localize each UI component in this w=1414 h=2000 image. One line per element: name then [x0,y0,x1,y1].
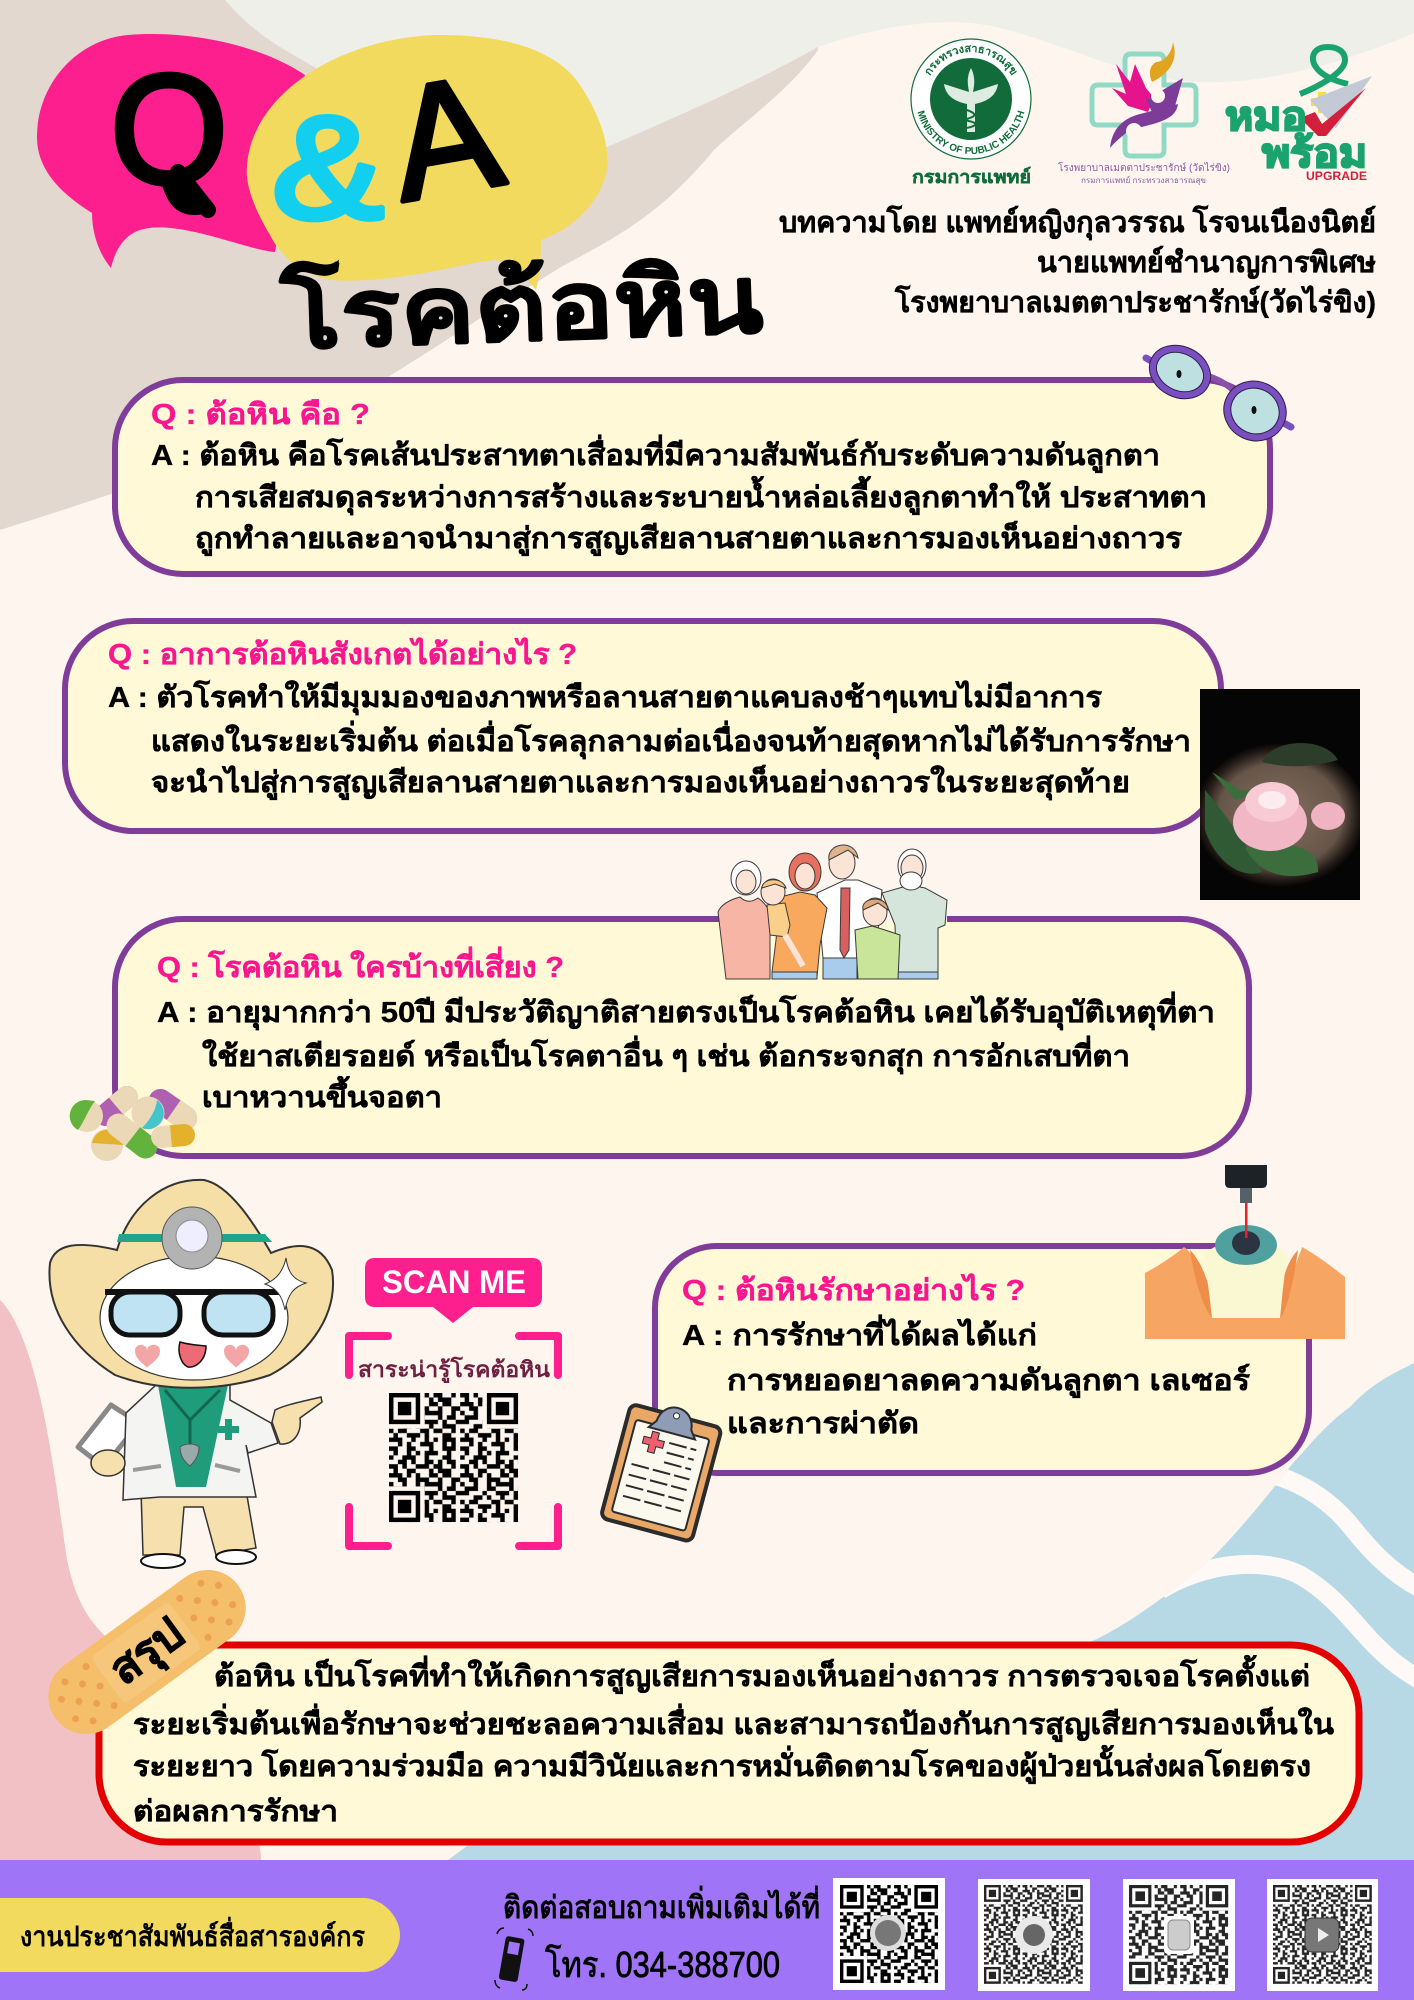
panel: treatment: Q : ต้อหินรักษาอย่างไร ? [682,1273,1025,1307]
logo: Metta hospital: โรงพยาบาลเมตตาประชารักษ์ (วัดไร่ขิง) [1058,161,1230,174]
heading: Q & A: A [377,40,514,235]
illustration: family [718,838,947,979]
QR code: glaucoma facts [349,1336,558,1546]
panel: summary: ระยะเริ่มต้นเพื่อรักษาจะช่วยชะลอความเสื่อม และสามารถป้องกันการสูญเสียการมองเห็นใน [133,1703,1334,1742]
icon: pills [70,1082,202,1163]
heading: Q & A [110,40,514,249]
footer bar [0,1860,1414,2000]
author credit [779,204,1376,319]
title: disease name: โรคต้อหิน [278,245,765,368]
panel: symptoms: จะนำไปสู่การสูญเสียลานสายตาและการมองเห็นอย่างถาวรในระยะสุดท้าย [151,764,1130,800]
panel: symptoms: แสดงในระยะเริ่มต้น ต่อเมื่อโรคลุกลามต่อเนื่องจนท้ายสุดหากไม่ได้รับการรักษา [151,720,1191,759]
bandage label: summary [33,1555,261,1749]
QR code: glaucoma facts: สาระน่ารู้โรคต้อหิน [358,1356,550,1384]
panel: what is glaucoma: ถูกทำลายและอาจนำมาสู่การสูญเสียลานสายตาและการมองเห็นอย่างถาวร [195,520,1182,556]
panel: treatment: และการผ่าตัด [727,1408,919,1440]
author credit: นายแพทย์ชำนาญการพิเศษ [1037,245,1376,280]
author credit: โรงพยาบาลเมตตาประชารักษ์(วัดไร่ขิง) [894,284,1376,319]
panel: symptoms: Q : อาการต้อหินสังเกตได้อย่างไร ? [108,637,577,671]
logo: Ministry of Public Health [910,38,1032,187]
panel: treatment [655,1246,1309,1473]
panel: treatment: A : การรักษาที่ได้ผลได้แก่ [682,1314,1037,1352]
logo: Metta hospital: กรมการแพทย์ กระทรวงสาธารณสุข [1081,175,1206,185]
logo: Ministry of Public Health: MINISTRY OF PUBLIC HEALTH [918,110,1024,154]
icon: glasses [1145,340,1291,446]
heading: Q & A: Q [110,43,228,217]
panel: risk groups: A : อายุมากกว่า 50ปี มีประวัติญาติสายตรงเป็นโรคต้อหิน เคยได้รับอุบัติเหตุที่ตา [157,991,1215,1030]
panel: summary: ระยะยาว โดยความร่วมมือ ความมีวินัยและการหมั่นติดตามโรคของผู้ป่วยนั้นส่งผลโดยตรง [133,1744,1311,1784]
panel: symptoms [65,621,1221,831]
speech bubble: yellow [247,35,608,290]
illustration: laser eye treatment [1145,1165,1345,1339]
panel: symptoms: A : ตัวโรคทำให้มีมุมมองของภาพหรือลานสายตาแคบลงช้าๆแทบไม่มีอาการ [108,679,1102,715]
panel: what is glaucoma: Q : ต้อหิน คือ ? [151,399,370,431]
speech bubble: pink [37,34,305,268]
contact text: โทร. 034-388700 [545,1944,780,1985]
logo: Mor Prom Upgrade [1225,47,1372,183]
panel: summary: ต่อผลการรักษา [133,1796,338,1828]
icon: clipboard [601,1396,724,1542]
panel: what is glaucoma: การเสียสมดุลระหว่างการสร้างและระบายน้ำหล่อเลี้ยงลูกตาทำให้ ประสาทตา [195,475,1207,515]
logo: Mor Prom Upgrade: พร้อม [1262,132,1367,176]
QR code: youtube [1267,1879,1378,1991]
panel: risk groups [115,919,1249,1156]
logo: Mor Prom Upgrade: UPGRADE [1306,169,1367,183]
logo: Ministry of Public Health: กรมการแพทย์ [912,166,1031,187]
panel: risk groups: เบาหวานขึ้นจอตา [202,1075,442,1114]
logo: Metta hospital [1058,42,1230,185]
mascot: doctor character [49,1180,333,1568]
icon: phone [495,1928,533,1990]
panel: what is glaucoma: A : ต้อหิน คือโรคเส้นประสาทตาเสื่อมที่มีความสัมพันธ์กับระดับความดันลูกตา [151,434,1160,473]
QR code: website [833,1878,945,1990]
panel: what is glaucoma [115,380,1270,574]
panel: treatment: การหยอดยาลดความดันลูกตา เลเซอร์ [727,1363,1250,1398]
panel: risk groups: ใช้ยาสเตียรอยด์ หรือเป็นโรคตาอื่น ๆ เช่น ต้อกระจกสุก การอักเสบที่ตา [202,1035,1130,1074]
contact text [503,1885,820,1985]
scan me badge: SCAN ME [382,1264,526,1300]
photo: rose seen through narrowed vision [1194,689,1366,900]
heading: Q & A: & [272,86,384,249]
logo: Mor Prom Upgrade: หมอ [1225,95,1307,139]
panel: summary [99,1645,1359,1842]
panel: risk groups: Q : โรคต้อหิน ใครบ้างที่เสี่ยง ? [157,946,564,984]
scan me badge [365,1258,542,1323]
QR code: line [1123,1879,1235,1991]
footer label: งานประชาสัมพันธ์สื่อสารองค์กร [20,1916,365,1952]
author credit: บทความโดย แพทย์หญิงกุลวรรณ โรจนเนืองนิตย์ [779,204,1376,240]
footer label [0,1898,400,1972]
contact text: ติดต่อสอบถามเพิ่มเติมได้ที่ [503,1885,820,1925]
bandage label: summary: สรุป [101,1609,195,1697]
panel: summary: ต้อหิน เป็นโรคที่ทำให้เกิดการสูญเสียการมองเห็นอย่างถาวร การตรวจเจอโรคตั้งแต่ [214,1654,1310,1694]
logo: Ministry of Public Health: กระทรวงสาธารณสุข [926,45,1017,76]
QR code: facebook [978,1879,1090,1991]
